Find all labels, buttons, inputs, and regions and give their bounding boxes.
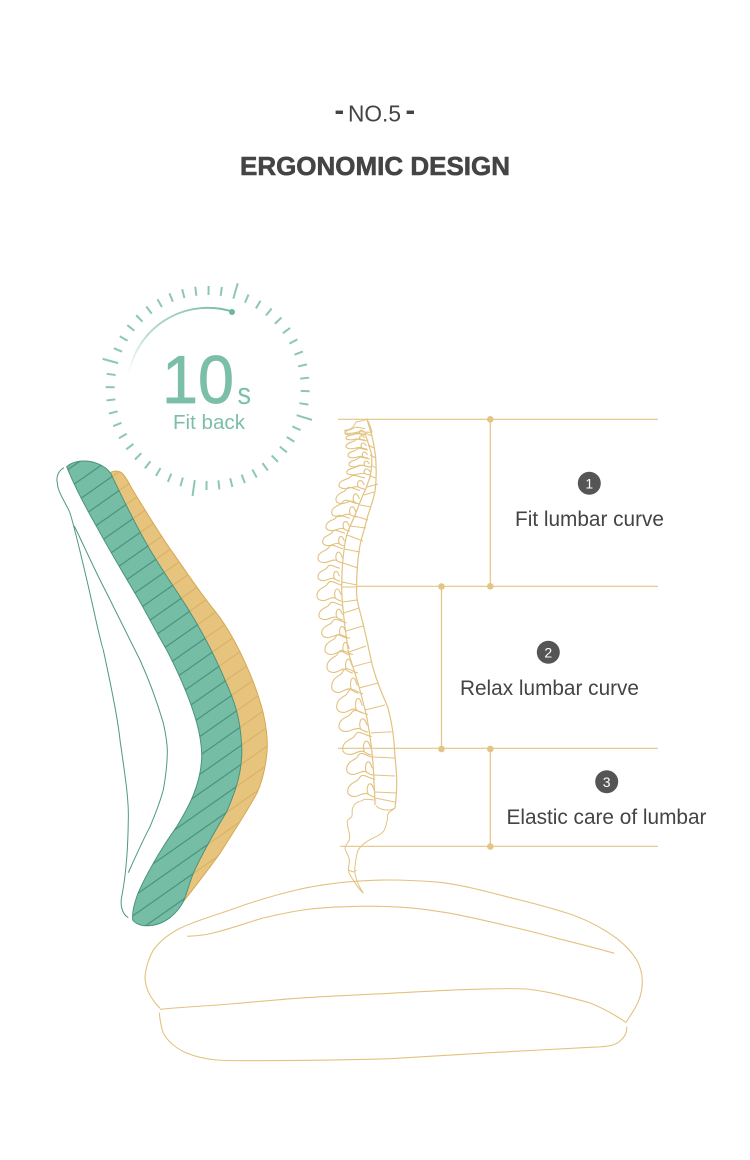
- dial tick marks: [103, 283, 312, 496]
- number badge 3: 3: [603, 774, 611, 790]
- number badge 3: [595, 770, 618, 793]
- dial: 10s fit back timer: [103, 283, 312, 496]
- vertebral body separators: [342, 433, 396, 810]
- cushion base: [159, 1013, 627, 1061]
- title: ERGONOMIC DESIGN: [240, 151, 510, 181]
- measurement lines and dots: [338, 416, 658, 850]
- section number: -: [334, 95, 344, 127]
- section number: [334, 95, 415, 127]
- cushion side section: [57, 461, 267, 926]
- spinous processes: [317, 427, 375, 797]
- number badge 2: 2: [544, 644, 552, 660]
- label: elastic care of lumbar: Elastic care of lumbar: [506, 806, 707, 829]
- callout 3: [506, 770, 707, 829]
- number badge 1: [578, 472, 601, 495]
- vertebral column edges: [342, 419, 397, 808]
- number badge 1: 1: [585, 476, 593, 492]
- cushion top outline: [145, 880, 642, 1022]
- label: relax lumbar curve: Relax lumbar curve: [460, 677, 639, 700]
- fit back label: Fit back: [173, 412, 246, 434]
- spine illustration: [317, 419, 397, 893]
- yellow layer: [110, 471, 267, 902]
- callout 1: [515, 472, 664, 531]
- section number: -: [406, 95, 415, 127]
- callout 2: [460, 641, 639, 700]
- cushion top groove: [187, 906, 614, 953]
- cushion middle seam: [160, 989, 626, 1022]
- seat cushion outline: [145, 880, 642, 1061]
- 10 s reading: 10: [162, 342, 234, 418]
- 10 s reading: s: [238, 376, 251, 411]
- section number: NO.5: [348, 100, 401, 126]
- top vertebra: [345, 419, 372, 433]
- sacrum and tailbone: [345, 799, 395, 893]
- green layer: [67, 461, 242, 926]
- progress arc: [128, 308, 235, 375]
- label: fit lumbar curve: Fit lumbar curve: [515, 508, 664, 531]
- thin outlines: [57, 468, 167, 918]
- number badge 2: [537, 641, 560, 664]
